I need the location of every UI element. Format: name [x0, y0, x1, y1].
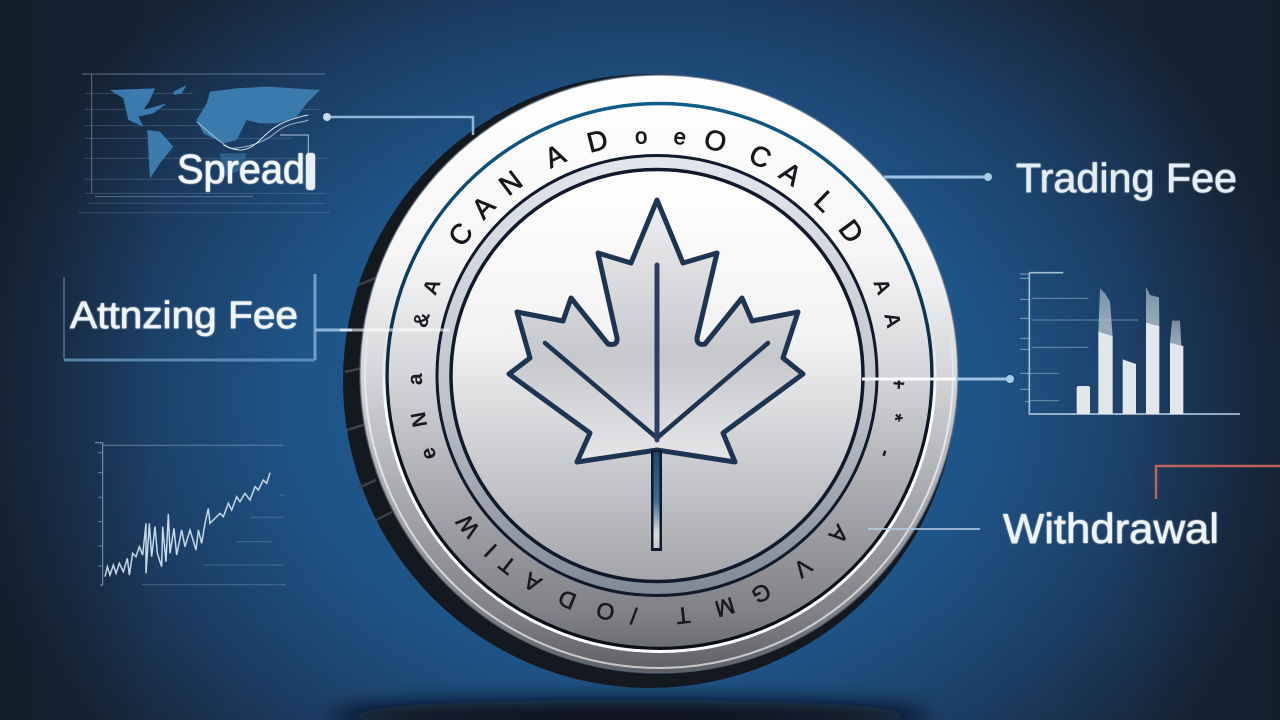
- coin side lettering: e: [416, 444, 441, 463]
- coin top lettering: C: [442, 217, 479, 252]
- bar upper translucent caps: [1098, 287, 1181, 346]
- coin bottom lettering: M: [712, 592, 738, 622]
- coin top lettering: o: [634, 123, 648, 149]
- coin bottom lettering: T: [675, 602, 692, 629]
- coin top lettering: C: [744, 138, 776, 175]
- bars: [1077, 323, 1183, 414]
- callout: trading fee connector: [884, 173, 992, 181]
- callout: bar chart connector: [862, 375, 1014, 383]
- coin bottom lettering: T: [494, 551, 521, 580]
- coin bottom lettering: D: [555, 585, 580, 615]
- panel: line chart: [95, 443, 286, 585]
- coin side lettering: [404, 276, 910, 463]
- icon: maple leaf: [509, 200, 803, 551]
- coin top lettering: L: [808, 185, 841, 218]
- coin: [343, 74, 958, 688]
- coin top lettering: [442, 123, 870, 252]
- coin top lettering: A: [540, 138, 570, 174]
- coin side lettering: -: [873, 447, 897, 461]
- bar chart axes: [1020, 273, 1240, 414]
- coin bottom lettering: A: [519, 567, 546, 598]
- coin top lettering: D: [584, 123, 611, 159]
- coin top lettering: A: [466, 190, 501, 225]
- label: spread: Spread: [177, 146, 305, 192]
- coin outer ring: [384, 100, 935, 652]
- coin bottom lettering: G: [748, 578, 775, 609]
- coin side lettering: &: [409, 310, 435, 330]
- coin ground shadow: [330, 700, 930, 720]
- line chart axes: [95, 443, 286, 585]
- coin bottom lettering: V: [788, 553, 817, 583]
- coin bottom lettering: /: [629, 603, 638, 629]
- callout: withdrawal connector: [868, 528, 980, 530]
- coin top lettering: O: [701, 123, 730, 158]
- coin side lettering: A: [868, 276, 895, 298]
- label: trading fee: Trading Fee: [1016, 155, 1237, 201]
- coin inner rings: [437, 156, 877, 596]
- coin bottom lettering: O: [594, 597, 617, 626]
- line chart data: [105, 473, 270, 577]
- coin side lettering: *: [883, 411, 907, 424]
- label: funding fee: Attnzing Fee: [70, 295, 298, 337]
- coin side lettering: A: [879, 310, 905, 330]
- coin side lettering: N: [407, 410, 432, 429]
- coin bottom lettering: A: [824, 520, 854, 549]
- coin side lettering: A: [419, 276, 446, 298]
- coin top lettering: A: [774, 156, 807, 192]
- map trend lines: [197, 115, 308, 153]
- coin top lettering: D: [833, 214, 870, 249]
- coin side lettering: a: [404, 373, 427, 385]
- callout: funding fee connector: [315, 328, 352, 332]
- label: withdrawal: Withdrawal: [1003, 505, 1219, 552]
- coin top lettering: e: [673, 124, 687, 150]
- coin bottom lettering: W: [451, 509, 485, 543]
- coin side lettering: +: [887, 377, 910, 390]
- coin top lettering: N: [493, 164, 528, 201]
- coin face: [360, 75, 958, 673]
- map grid and axes: [78, 74, 330, 213]
- coin bottom lettering: [451, 509, 854, 629]
- map continents: [110, 85, 320, 178]
- panel: funding fee box: [64, 274, 315, 360]
- callout: spread connector: [323, 113, 473, 135]
- leaf stem: [651, 450, 662, 551]
- coin rim back: [343, 74, 957, 688]
- panel: bar chart: [1020, 273, 1240, 414]
- panel: spread world map chart: [78, 74, 330, 213]
- red corner accent: [1156, 466, 1280, 499]
- coin bottom lettering: I: [479, 539, 502, 562]
